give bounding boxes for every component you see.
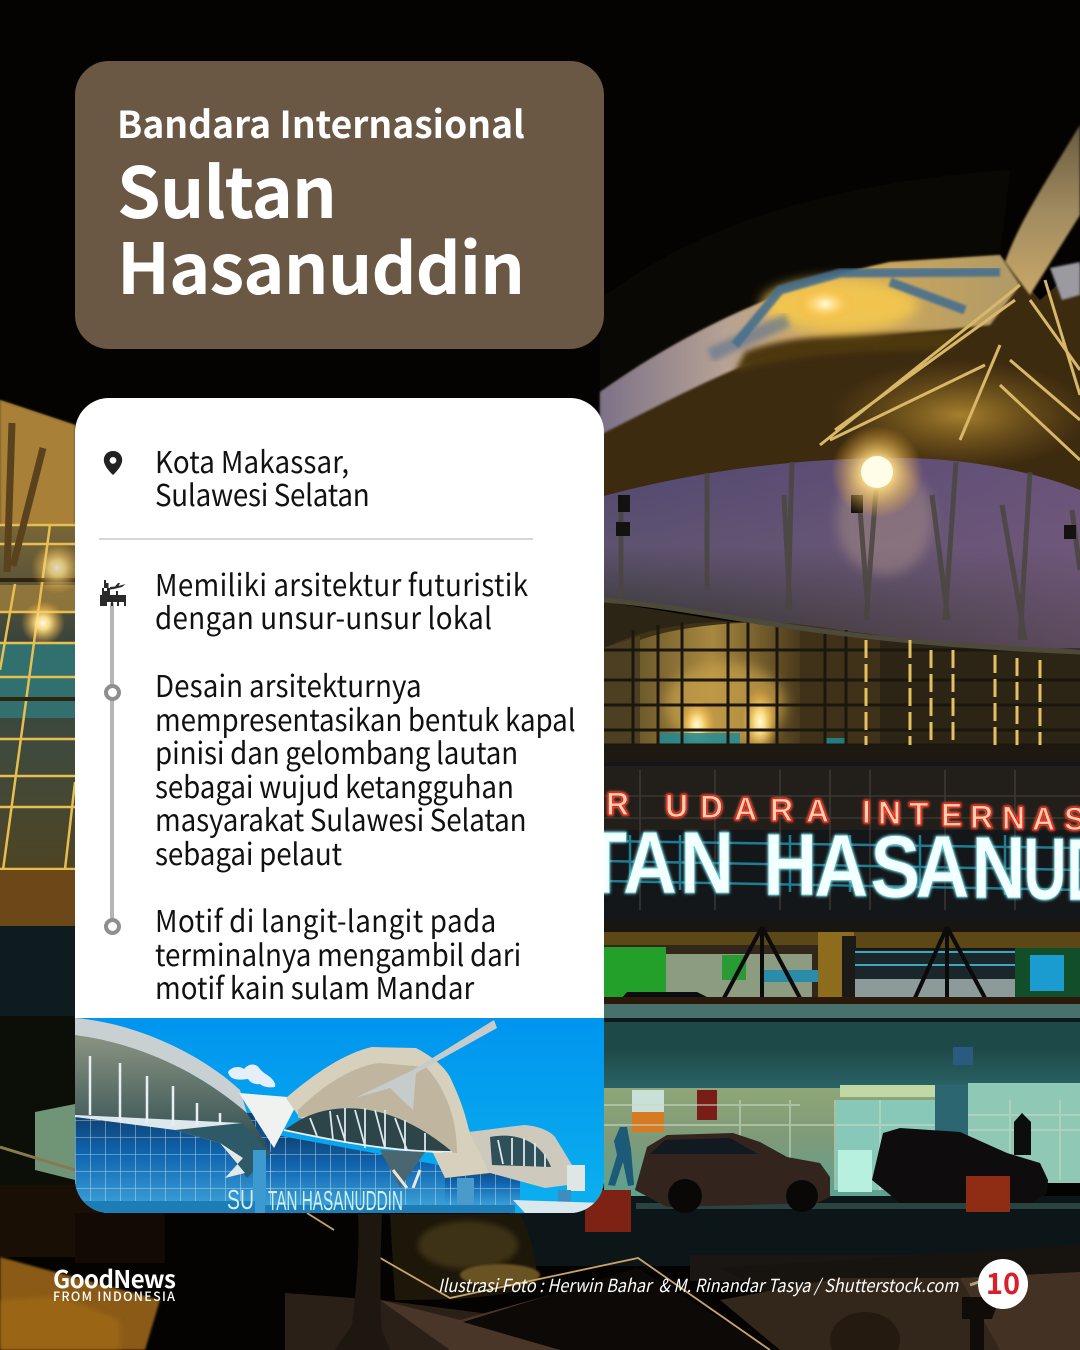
yellow mullion dashes (866, 640, 1040, 762)
title panel (75, 61, 604, 349)
right wing (469, 1125, 583, 1188)
page number (978, 1259, 1028, 1309)
photo credit: Ilustrasi Foto : Herwin Bahar & M. Rinandar Tasya / Shutterstock.com (438, 1272, 958, 1298)
information card (75, 398, 604, 1213)
store level (604, 920, 1080, 950)
bushes (390, 1214, 536, 1300)
logo (53, 1260, 176, 1305)
lavender ceiling (604, 458, 1080, 655)
fact three text (155, 897, 521, 1008)
title kicker: Bandara Internasional (117, 95, 525, 149)
center roof (286, 1047, 490, 1178)
icon: airport tower and plane (100, 580, 126, 606)
plaza (720, 1278, 1080, 1350)
red barrier (585, 1190, 631, 1232)
shop interiors (604, 1088, 935, 1200)
glass facade (75, 1113, 275, 1205)
white wedge (239, 1093, 300, 1148)
page number: 10 (986, 1261, 1020, 1303)
logo subtitle: FROM INDONESIA (53, 1286, 176, 1305)
sign: red neon text: RUDARAINTERNAS (606, 786, 1080, 837)
car one (635, 1133, 830, 1207)
title main: Hasanuddin (117, 214, 524, 315)
fact two text (155, 662, 575, 874)
fact one text: dengan unsur-unsur lokal (155, 594, 492, 638)
fact three text: terminalnya mengambil dari (155, 930, 521, 974)
icon: location pin (104, 451, 122, 475)
fact two text: pinisi dan gelombang lautan (155, 729, 518, 773)
fact one text (155, 561, 528, 638)
sign: white neon text: TANHASAN (581, 814, 1026, 917)
fact two text: mempresentasikan bentuk kapal (155, 696, 575, 740)
fin (355, 1020, 497, 1110)
fact three text: Motif di langit-langit pada (155, 897, 497, 941)
fact two text: Desain arsitekturnya (155, 662, 422, 706)
struts under fin (820, 280, 1080, 460)
title main: Sultan (117, 138, 336, 239)
roof fascia (600, 255, 1020, 435)
ceiling struts (621, 462, 1080, 640)
glazing frame (604, 622, 1080, 760)
roof soffit (600, 255, 1080, 498)
location text: Kota Makassar, (155, 438, 349, 482)
timeline line (110, 603, 114, 925)
tree trunk (335, 1214, 390, 1350)
lit glazing (604, 602, 1080, 770)
lower terrace (285, 1293, 770, 1350)
logo wordmark: GoodNews (53, 1260, 175, 1295)
roof fin (1005, 125, 1080, 295)
left roof (75, 1035, 271, 1153)
fact two text: sebagai wujud ketangguhan (155, 762, 514, 806)
timeline node (104, 684, 121, 701)
fact two text: masyarakat Sulawesi Selatan (155, 796, 526, 840)
divider (99, 538, 533, 540)
car two (872, 1128, 1048, 1203)
terminal daytime photo (75, 1018, 604, 1213)
timeline node (104, 918, 121, 935)
title main (117, 138, 524, 315)
bottom-left gold floor (0, 1257, 160, 1350)
left building (0, 400, 75, 875)
road (510, 1196, 1080, 1266)
location text (155, 438, 369, 515)
lower level (604, 1004, 1080, 1018)
fact one text: Memiliki arsitektur futuristik (155, 561, 528, 605)
fact two text: sebagai pelaut (155, 830, 342, 874)
sign band (604, 762, 1080, 922)
person (608, 1127, 634, 1186)
fact three text: motif kain sulam Mandar (155, 964, 474, 1008)
location text: Sulawesi Selatan (155, 471, 369, 515)
dark upper roof silhouette (600, 170, 1010, 392)
